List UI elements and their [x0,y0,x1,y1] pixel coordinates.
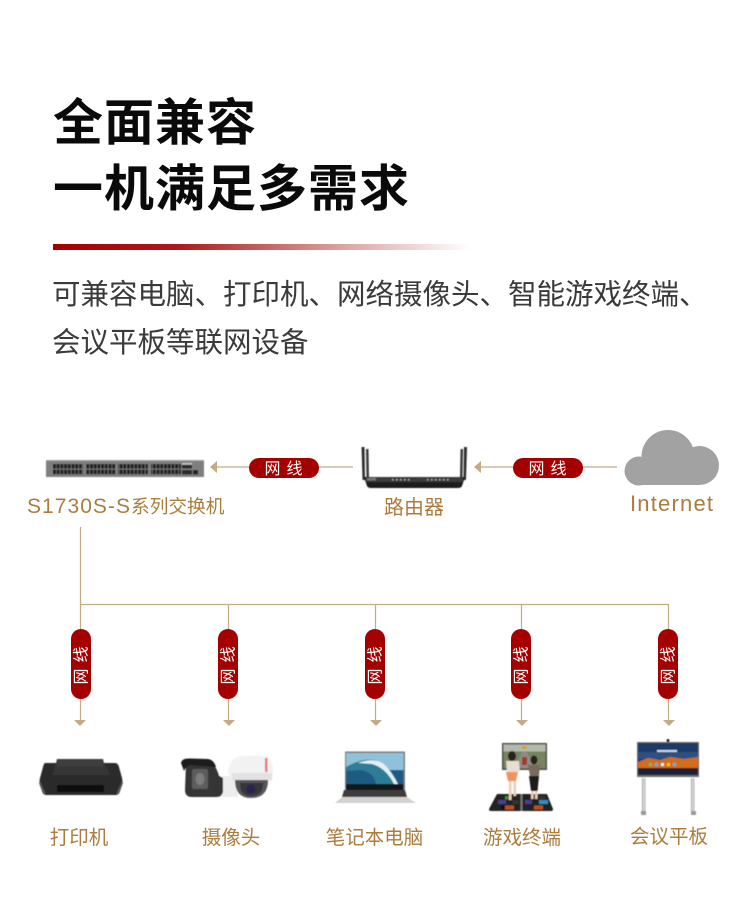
branch: camera cable [218,629,238,726]
icon: printer [39,759,123,795]
icon: cloud [624,430,719,486]
branch: laptop cable [365,629,385,726]
icon: router [362,447,467,488]
cable pill: router to switch [249,458,319,478]
title gradient rule [53,244,470,250]
branch: game terminal cable [511,629,531,726]
icon: switch [46,460,204,477]
label: router: 路由器 [384,496,444,519]
icon: cameras [181,756,273,798]
branch: printer cable [71,629,91,726]
title: 全面兼容 [53,95,257,151]
device labels: 摄像头 [202,827,260,849]
description text [52,279,708,359]
device labels: 笔记本电脑 [326,827,423,849]
description text: 可兼容电脑、打印机、网络摄像头、智能游戏终端、 [52,279,708,311]
icon: dance game [489,743,553,811]
title: 一机满足多需求 [53,161,410,217]
label: switch: S1730S-S系列交换机 [27,495,225,518]
device labels [50,826,708,849]
arrow: internet to router [474,461,617,473]
title [53,95,410,217]
device labels: 打印机 [50,827,109,849]
icon: laptop [335,752,416,803]
branch: conference board cable [658,629,678,726]
device labels: 游戏终端 [483,827,561,849]
icon: conference board [637,739,699,815]
branch: camera cable: 网线 [220,640,238,685]
branch: printer cable: 网线 [72,640,90,685]
branch: conference board cable: 网线 [660,640,678,685]
cable pill: router to switch: 网线 [264,460,309,478]
arrow: router to switch [210,461,353,473]
branch: laptop cable: 网线 [366,640,384,685]
cable pill: internet to router [513,458,583,478]
description text: 会议平板等联网设备 [52,327,309,359]
device labels: 会议平板 [630,826,708,848]
branch: game terminal cable: 网线 [512,640,530,685]
connector tree [80,527,668,629]
cable pill: internet to router: 网线 [528,460,573,478]
label: internet: Internet [630,491,713,516]
